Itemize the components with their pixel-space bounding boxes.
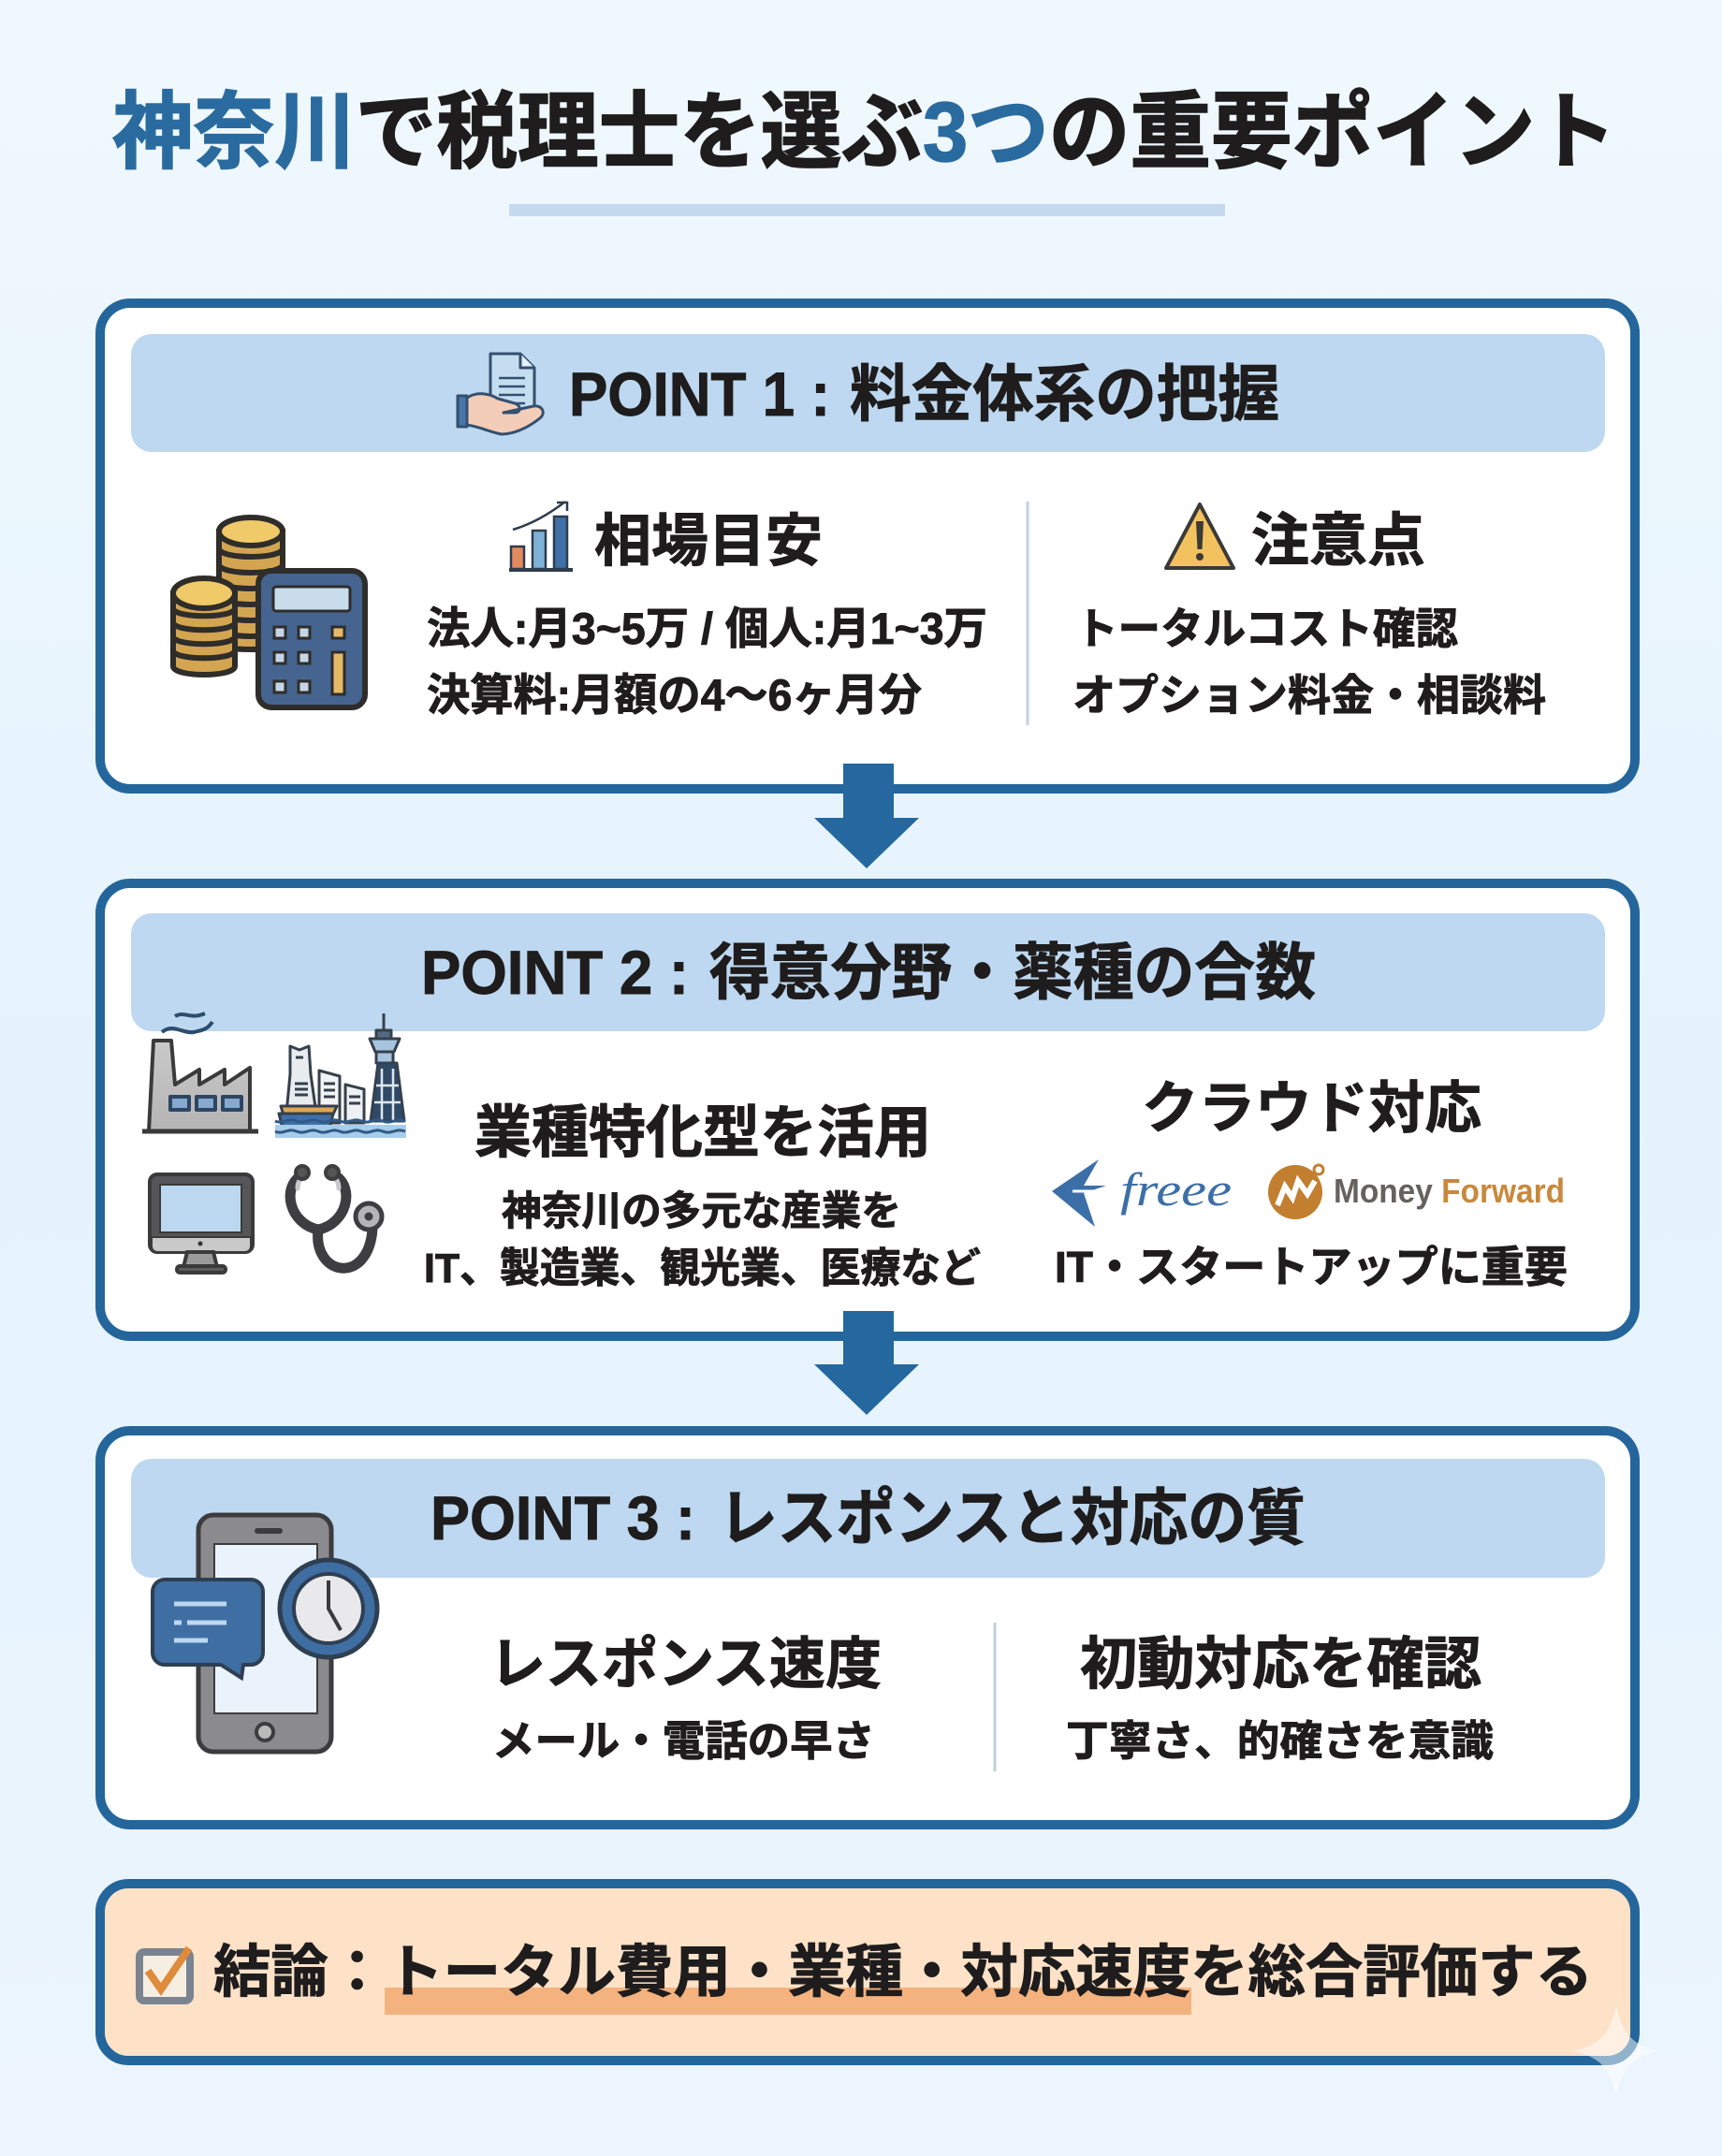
text: cautions (1073, 605, 1546, 720)
text: industries: 神奈川の多元な産業を (502, 1189, 901, 1234)
point 2 header: POINT 2 : (421, 938, 689, 1007)
point 3 header (131, 1459, 1605, 1578)
text: cautions: オプション料金・相談料 (1073, 671, 1546, 720)
point 1 header (131, 334, 1605, 452)
panel: point 3 (100, 1431, 1635, 1825)
text: initial response: 丁寧さ、的確さを意識 (1066, 1717, 1494, 1765)
icon: hand holding document (458, 354, 543, 434)
point 1 header: POINT 1 : (569, 359, 830, 429)
title: 神奈川で税理士を選ぶ3つの重要ポイント (112, 86, 1616, 180)
subheading: クラウド対応: クラウド対応 (1142, 1077, 1481, 1140)
icon: Yokohama skyline (275, 1013, 406, 1138)
panel: point 2 (100, 883, 1635, 1336)
subheading: 相場目安: 相場目安 (594, 509, 823, 573)
logo: Money Forward: Money Forward (1334, 1172, 1565, 1210)
icon: factory (142, 1013, 258, 1131)
icon: phone, chat bubble and clock (153, 1515, 377, 1752)
logo: freee: freee (1120, 1163, 1232, 1216)
icon: checkbox (139, 1948, 190, 2001)
icon: coins and calculator (173, 517, 365, 707)
panel: conclusion (100, 1884, 1659, 2096)
icon: rising bar chart (509, 502, 573, 570)
text: IT startup: IT・スタートアップに重要 (1055, 1243, 1568, 1291)
subheading: 初動対応を確認: 初動対応を確認 (1080, 1632, 1481, 1696)
arrow: point 2 to point 3 (814, 1311, 919, 1415)
icon: sparkle (1572, 2005, 1659, 2096)
subheading: レスポンス速度: レスポンス速度 (489, 1633, 882, 1696)
point 2 header (131, 913, 1605, 1031)
icon: stethoscope (290, 1166, 382, 1268)
logo: freee (1052, 1159, 1232, 1227)
text: fee estimates: 法人:月3~5万 / 個人:月1~3万 (427, 604, 987, 653)
point 1 header: 料金体系の把握 (850, 359, 1279, 429)
text: cautions: トータルコスト確認 (1075, 605, 1458, 653)
arrow: point 1 to point 2 (814, 764, 919, 868)
text: conclusion: 結論：トータル費用・業種・対応速度を総合評価する (213, 1940, 1593, 2003)
point 3 header: POINT 3 : (430, 1483, 695, 1552)
text: response speed: メール・電話の早さ (492, 1717, 875, 1765)
panel: point 1 (100, 303, 1635, 789)
text: fee estimates: 決算料:月額の4〜6ヶ月分 (427, 670, 922, 720)
point 3 header: レスポンスと対応の質 (719, 1483, 1306, 1552)
text: fee estimates (427, 604, 987, 720)
text: industries (424, 1189, 981, 1291)
icon: warning (1166, 504, 1233, 568)
logo: Money Forward (1268, 1165, 1565, 1219)
text: industries: IT、製造業、観光業、医療など (424, 1246, 981, 1291)
icon: computer monitor (150, 1174, 253, 1273)
highlight (385, 1988, 1191, 2015)
subheading: 業種特化型を活用: 業種特化型を活用 (474, 1100, 931, 1164)
point 2 header: 得意分野・薬種の合数 (709, 938, 1316, 1007)
subheading: 注意点: 注意点 (1251, 509, 1425, 574)
